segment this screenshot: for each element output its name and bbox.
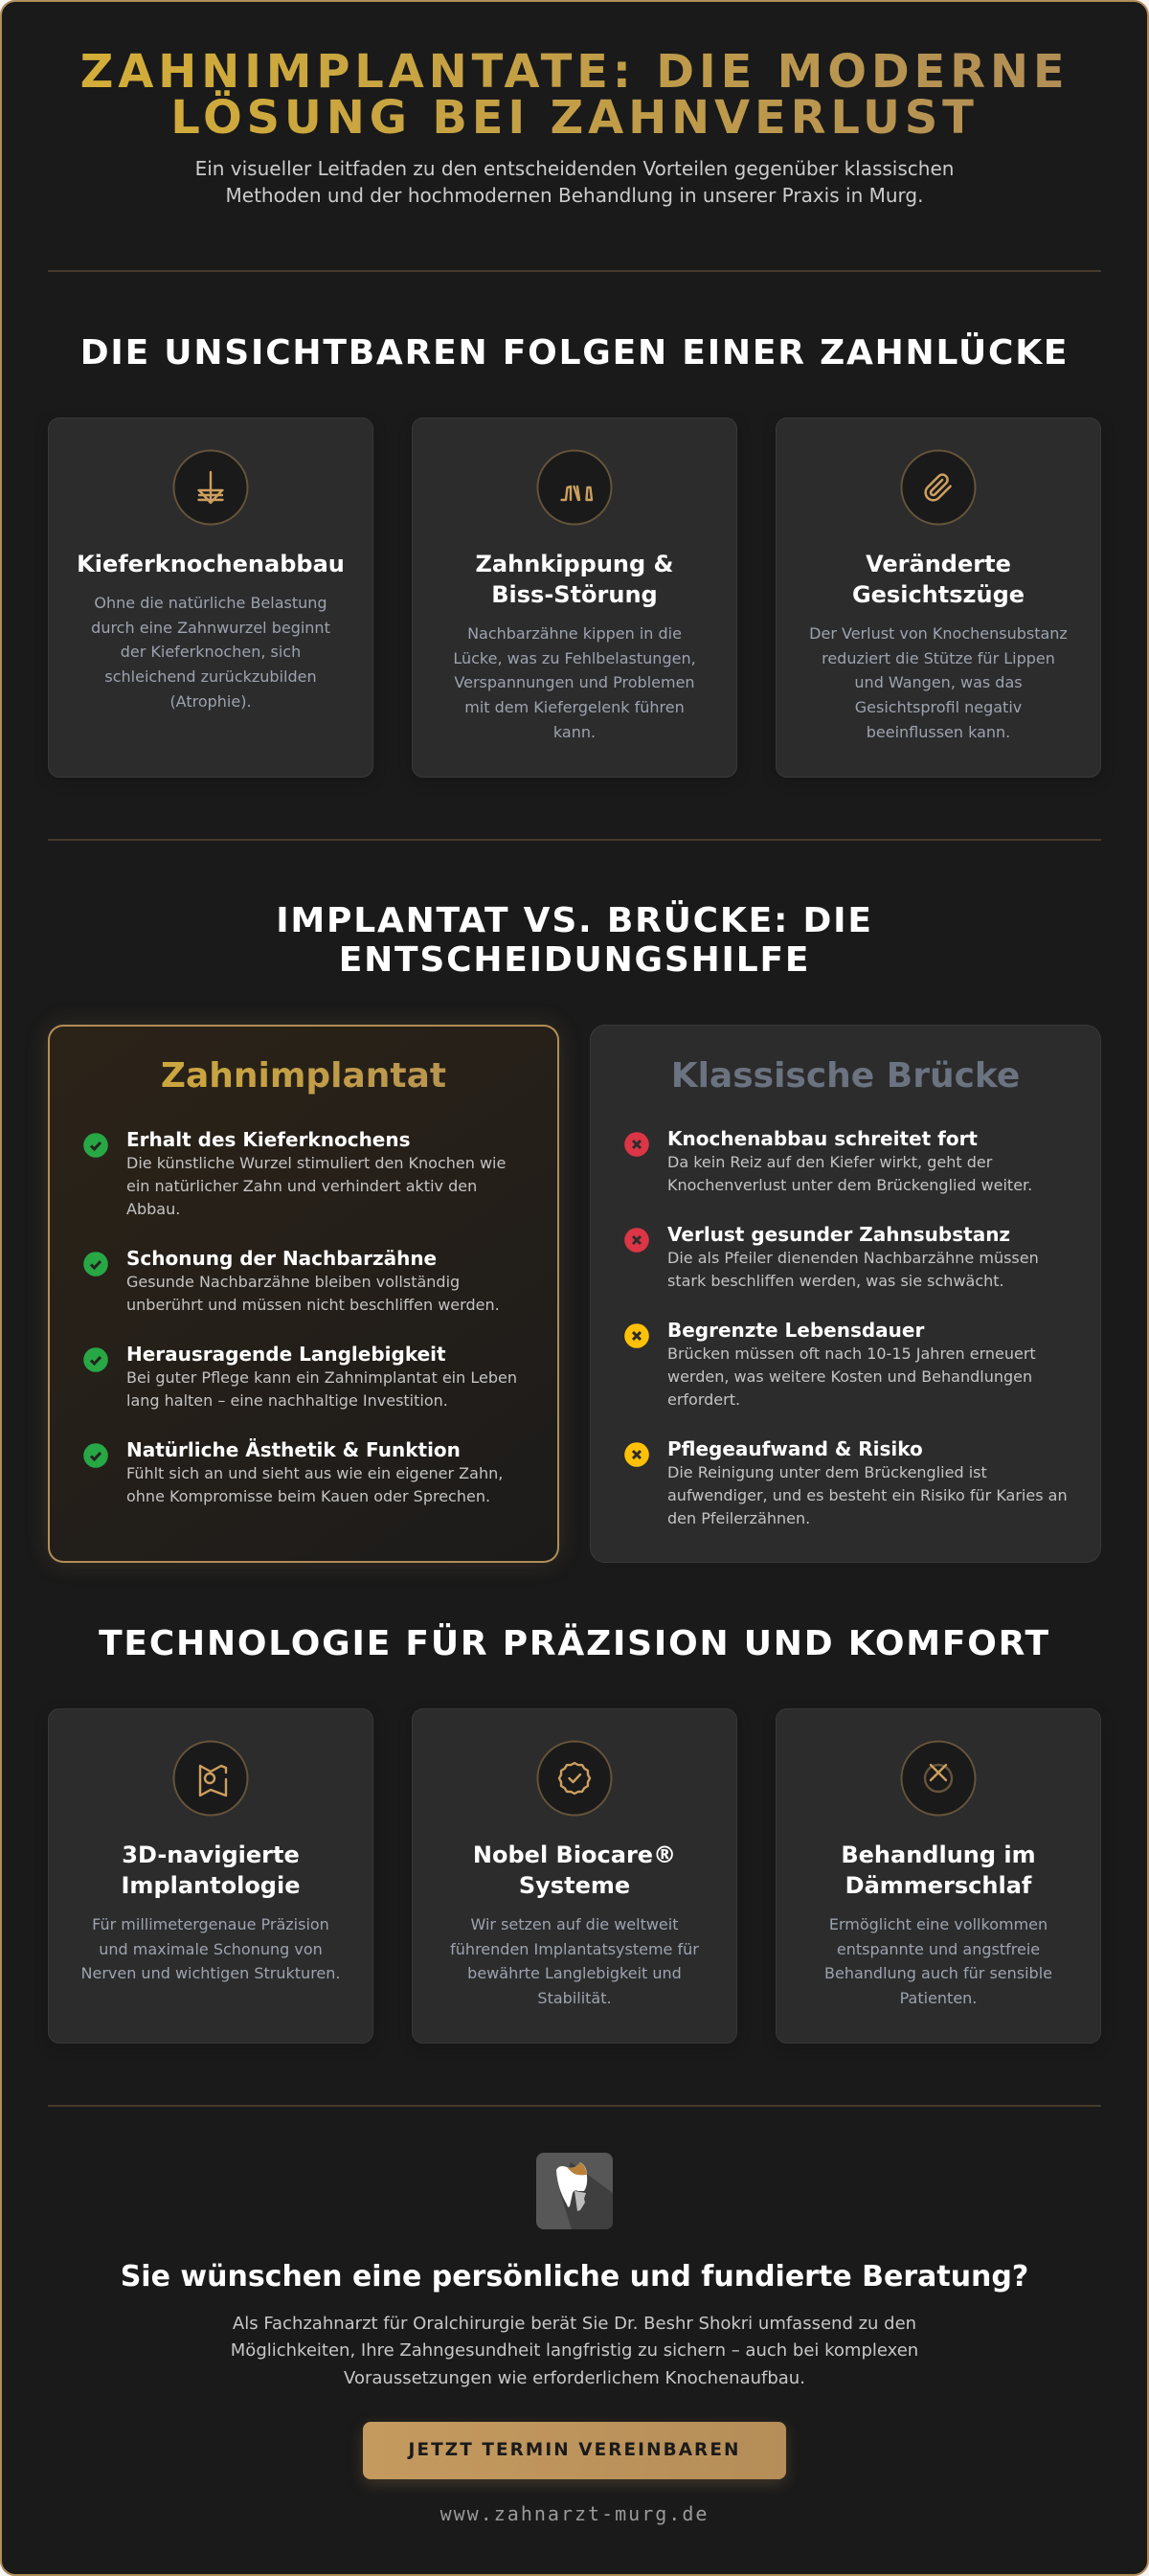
card title: Nobel Biocare®	[473, 1842, 676, 1868]
panel: Zahnimplantat: Bei guter Pflege kann ein Zahnimplantat ein Leben	[126, 1368, 517, 1387]
benefit: Langlebigkeit	[83, 1343, 517, 1410]
card text: Nachbarzähne kippen in die	[467, 624, 682, 643]
icon: paperclip	[900, 450, 977, 525]
panel title: Zahnimplantat	[161, 1056, 446, 1096]
card text: Für millimetergenaue Präzision	[92, 1915, 329, 1933]
panel: Klassische Brücke: Knochenabbau schreitet fort	[667, 1127, 978, 1150]
card text: kann.	[553, 723, 596, 741]
panel: Zahnimplantat: lang halten – eine nachhaltige Investition.	[126, 1391, 448, 1410]
card title	[852, 551, 1025, 608]
card text	[824, 1915, 1052, 2007]
heading: vergleich	[276, 900, 873, 980]
card text: und maximale Schonung von	[99, 1940, 323, 1958]
card title: Dämmerschlaf	[845, 1872, 1031, 1899]
panel: Zahnimplantat: Erhalt des Kieferknochens	[126, 1128, 411, 1151]
panel: Klassische Brücke: Brücken müssen oft nach 10-15 Jahren erneuert	[667, 1344, 1036, 1363]
card text: Ohne die natürliche Belastung	[94, 594, 327, 612]
panel: Zahnimplantat: Die künstliche Wurzel stimuliert den Knochen wie	[126, 1154, 506, 1172]
logo: tooth implant	[536, 2153, 613, 2229]
card title: Kieferknochenabbau	[77, 551, 345, 577]
card text	[91, 594, 330, 711]
drawback: Zahnsubstanz	[624, 1223, 1039, 1290]
panel: Zahnimplantat: Abbau.	[126, 1200, 180, 1218]
card text: Stabilität.	[537, 1989, 612, 2007]
panel: Zahnimplantat: ohne Kompromisse beim Kauen oder Sprechen.	[126, 1487, 490, 1505]
panel: Klassische Brücke: erfordert.	[667, 1390, 740, 1409]
card text: Gesichtsprofil negativ	[855, 698, 1022, 716]
drawback: Knochenabbau	[624, 1127, 1032, 1194]
card text: Verspannungen und Problemen	[454, 673, 695, 691]
card text: durch eine Zahnwurzel beginnt	[91, 619, 330, 637]
card text: Behandlung auch für sensible	[824, 1964, 1052, 1982]
card text: entspannte und angstfreie	[837, 1940, 1040, 1958]
call-to-action heading: Sie wünschen eine persönliche und fundierte Beratung?	[121, 2260, 1028, 2294]
card title	[121, 1842, 300, 1899]
title: LÖSUNG BEI ZAHNVERLUST	[170, 91, 979, 145]
panel title	[48, 1055, 559, 1097]
title: ZAHNIMPLANTATE: DIE MODERNE	[80, 45, 1069, 99]
card title: Biss-Störung	[491, 581, 658, 608]
card text: reduziert die Stütze für Lippen	[822, 649, 1055, 667]
panel: Nobel Biocare	[412, 1708, 737, 2044]
heading: vergleich: IMPLANTAT VS. BRÜCKE: DIE	[276, 901, 873, 940]
call-to-action text	[231, 2314, 918, 2388]
card text: Ermöglicht eine vollkommen	[829, 1915, 1048, 1933]
panel: Zahnimplantat: Herausragende Langlebigkeit	[126, 1343, 446, 1366]
card text: und Wangen, was das	[854, 673, 1023, 691]
panel: Klassische Brücke: Pflegeaufwand & Risiko	[667, 1437, 923, 1460]
card title	[841, 1842, 1036, 1899]
icon: bone loss	[172, 450, 249, 525]
card title	[473, 1842, 676, 1899]
benefit: Nachbarzähne	[83, 1247, 500, 1314]
call-to-action text: Voraussetzungen wie erforderlichem Knochenaufbau.	[344, 2368, 805, 2388]
call-to-action text: Möglichkeiten, Ihre Zahngesundheit langfristig zu sichern – auch bei komplexen	[231, 2340, 918, 2361]
panel: Klassische Brücke: Verlust gesunder Zahnsubstanz	[667, 1223, 1010, 1246]
card text: Wir setzen auf die weltweit	[471, 1915, 678, 1933]
panel: 3D-Navigation	[48, 1708, 373, 2044]
panel: Klassische Brücke: Die als Pfeiler dienenden Nachbarzähne müssen	[667, 1249, 1039, 1267]
card text: bewährte Langlebigkeit und	[467, 1964, 682, 1982]
heading: folgen: DIE UNSICHTBAREN FOLGEN EINER ZAHNLÜCKE	[80, 333, 1069, 373]
website url: www.zahnarzt-murg.de	[440, 2502, 709, 2525]
panel: Zahnimplantat: Schonung der Nachbarzähne	[126, 1247, 437, 1270]
card title: 3D-navigierte	[122, 1842, 300, 1868]
panel title: Klassische Brücke	[671, 1056, 1020, 1096]
card title: Systeme	[519, 1872, 630, 1899]
card text: Lücke, was zu Fehlbelastungen,	[453, 649, 696, 667]
drawback: Pflegeaufwand	[624, 1437, 1068, 1527]
icon: tilted teeth	[536, 450, 613, 525]
panel: Klassische Brücke: werden, was weitere Kosten und Behandlungen	[667, 1367, 1032, 1386]
card text: der Kieferknochen, sich	[121, 643, 301, 661]
card text: Nerven und wichtigen Strukturen.	[80, 1964, 341, 1982]
icon: badge check	[536, 1741, 613, 1816]
benefit: Ästhetik	[83, 1438, 503, 1505]
panel: Zahnimplantat	[48, 1025, 559, 1563]
card title: Gesichtszüge	[852, 581, 1025, 608]
panel: Zahnimplantat: Fühlt sich an und sieht aus wie ein eigener Zahn,	[126, 1464, 503, 1482]
subtitle	[195, 157, 954, 207]
panel: Zahnimplantat: Gesunde Nachbarzähne bleiben vollständig	[126, 1273, 460, 1291]
card title: Zahnkippung &	[476, 551, 673, 577]
subtitle: Ein visueller Leitfaden zu den entscheidenden Vorteilen gegenüber klassischen	[195, 157, 954, 180]
heading: technologie: TECHNOLOGIE FÜR PRÄZISION UND KOMFORT	[99, 1624, 1050, 1663]
card title: Behandlung im	[841, 1842, 1036, 1868]
panel: Zahnimplantat: Natürliche Ästhetik & Funktion	[126, 1438, 461, 1461]
card text	[809, 624, 1068, 741]
panel: Dämmerschlaf	[776, 1708, 1101, 2044]
card text	[80, 1915, 341, 1982]
panel: Klassische Brücke: Knochenverlust unter dem Brückenglied weiter.	[667, 1176, 1032, 1194]
icon: sedation	[900, 1741, 977, 1816]
card title: Veränderte	[866, 551, 1011, 577]
panel: Zahnimplantat: unberührt und müssen nicht beschliffen werden.	[126, 1296, 500, 1314]
panel: Klassische Brücke: aufwendiger, und es besteht ein Risiko für Karies an	[667, 1486, 1068, 1504]
panel: Klassische Brücke: den Pfeilerzähnen.	[667, 1509, 810, 1527]
title	[80, 45, 1069, 145]
panel: Kieferknochenabbau	[48, 418, 373, 778]
panel: Zahnimplantat: ein natürlicher Zahn und verhindert aktiv den	[126, 1177, 477, 1195]
panel: Klassische Brücke: Da kein Reiz auf den Kiefer wirkt, geht der	[667, 1153, 992, 1171]
panel: Klassische Brücke	[590, 1025, 1101, 1563]
card text	[453, 624, 696, 741]
panel: Klassische Brücke: Begrenzte Lebensdauer	[667, 1319, 924, 1342]
call-to-action text: Als Fachzahnarzt für Oralchirurgie berät Sie Dr. Beshr Shokri umfassend zu den	[233, 2314, 916, 2334]
button	[363, 2422, 786, 2479]
panel: Gesichtszüge	[776, 418, 1101, 778]
drawback: Lebensdauer	[624, 1319, 1036, 1409]
card text: Patienten.	[900, 1989, 977, 2007]
subtitle: Methoden und der hochmodernen Behandlung in unserer Praxis in Murg.	[226, 184, 923, 207]
card text: Der Verlust von Knochensubstanz	[809, 624, 1068, 643]
button: JETZT TERMIN VEREINBAREN	[409, 2440, 740, 2460]
card text: (Atrophie).	[169, 692, 252, 711]
card text: beeinflussen kann.	[867, 723, 1010, 741]
card text: schleichend zurückzubilden	[104, 667, 317, 686]
panel: Zahnkippung	[412, 418, 737, 778]
panel: Klassische Brücke: stark beschliffen werden, was sie schwächt.	[667, 1272, 1004, 1290]
card text: mit dem Kiefergelenk führen	[464, 698, 685, 716]
panel: Klassische Brücke: Die Reinigung unter dem Brückenglied ist	[667, 1463, 987, 1481]
card title: Implantologie	[121, 1872, 300, 1899]
benefit: Kieferknochen	[83, 1128, 506, 1218]
icon: 3D map	[172, 1741, 249, 1816]
card text: führenden Implantatsysteme für	[450, 1940, 699, 1958]
card text	[450, 1915, 699, 2007]
card title	[476, 551, 673, 608]
heading: vergleich: ENTSCHEIDUNGSHILFE	[339, 940, 810, 980]
